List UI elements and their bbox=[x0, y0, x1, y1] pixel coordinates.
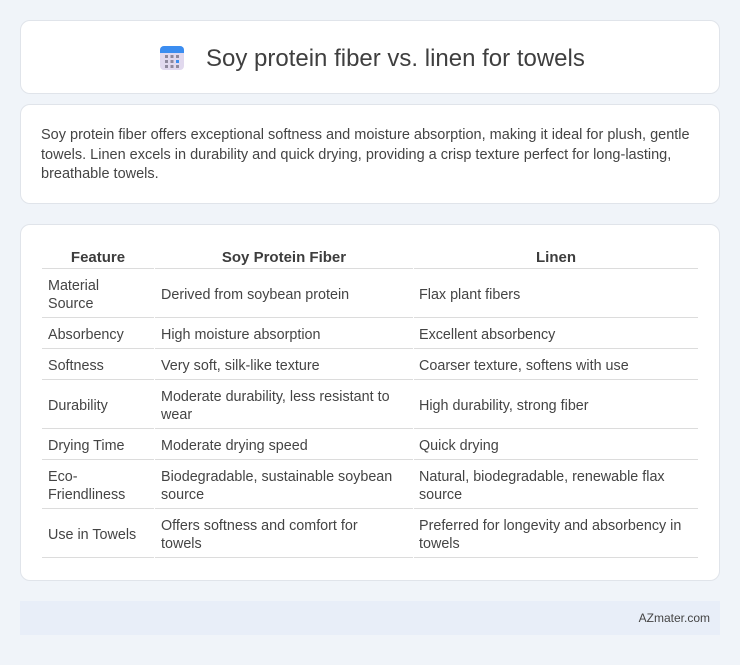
row: use in towels: Use in Towels bbox=[48, 527, 136, 543]
row: absorbency: High moisture absorption bbox=[161, 327, 320, 343]
title: Soy protein fiber vs. linen for towels bbox=[206, 45, 585, 72]
row: softness bbox=[48, 358, 629, 374]
row: material source: Flax plant fibers bbox=[419, 287, 520, 303]
panel: summary bbox=[20, 104, 720, 204]
row: drying time: Drying Time bbox=[48, 438, 125, 454]
summary text bbox=[41, 127, 690, 182]
row: eco-friendliness bbox=[48, 469, 665, 503]
row: eco-friendliness: source bbox=[419, 487, 462, 503]
row: eco-friendliness: Eco- bbox=[48, 469, 78, 485]
row: absorbency: Absorbency bbox=[48, 327, 124, 343]
row: drying time: Quick drying bbox=[419, 438, 499, 454]
footer text: AZmater.com bbox=[639, 611, 710, 625]
table header: Feature bbox=[71, 249, 125, 266]
row: use in towels: Offers softness and comfort for bbox=[161, 518, 358, 534]
row: durability: High durability, strong fiber bbox=[419, 398, 589, 414]
panel: comparison table bbox=[20, 224, 720, 581]
row: drying time bbox=[48, 438, 499, 454]
row: drying time: Moderate drying speed bbox=[161, 438, 308, 454]
row: use in towels: towels bbox=[419, 536, 460, 552]
row: durability: wear bbox=[161, 407, 192, 423]
row: use in towels bbox=[48, 518, 681, 552]
row: softness: Coarser texture, softens with use bbox=[419, 358, 629, 374]
row: material source: Source bbox=[48, 296, 93, 312]
row: eco-friendliness: Natural, biodegradable, renewable flax bbox=[419, 469, 665, 485]
row: material source: Derived from soybean protein bbox=[161, 287, 349, 303]
table header: Linen bbox=[536, 249, 576, 266]
row: durability bbox=[48, 389, 589, 423]
row: material source: Material bbox=[48, 278, 99, 294]
table header bbox=[71, 249, 576, 266]
row: eco-friendliness: source bbox=[161, 487, 204, 503]
row: durability: Durability bbox=[48, 398, 108, 414]
row: softness: Softness bbox=[48, 358, 104, 374]
summary text: breathable towels. bbox=[41, 166, 159, 182]
row: use in towels: Preferred for longevity and absorbency in bbox=[419, 518, 681, 534]
icon: calendar bbox=[160, 46, 184, 70]
panel: title card bbox=[20, 20, 720, 94]
table header: Soy Protein Fiber bbox=[222, 249, 346, 266]
summary text: towels. Linen excels in durability and quick drying, providing a crisp texture perfect for long-lasting, bbox=[41, 146, 671, 162]
row: absorbency bbox=[48, 327, 556, 343]
row: eco-friendliness: Friendliness bbox=[48, 487, 125, 503]
row: durability: Moderate durability, less resistant to bbox=[161, 389, 390, 405]
row: eco-friendliness: Biodegradable, sustainable soybean bbox=[161, 469, 392, 485]
summary text: Soy protein fiber offers exceptional softness and moisture absorption, making it ideal for plush, gentle bbox=[41, 127, 690, 143]
footer bar bbox=[20, 601, 720, 635]
row: material source bbox=[48, 278, 520, 312]
row: absorbency: Excellent absorbency bbox=[419, 327, 555, 343]
row: softness: Very soft, silk-like texture bbox=[161, 358, 320, 374]
row: use in towels: towels bbox=[161, 536, 202, 552]
